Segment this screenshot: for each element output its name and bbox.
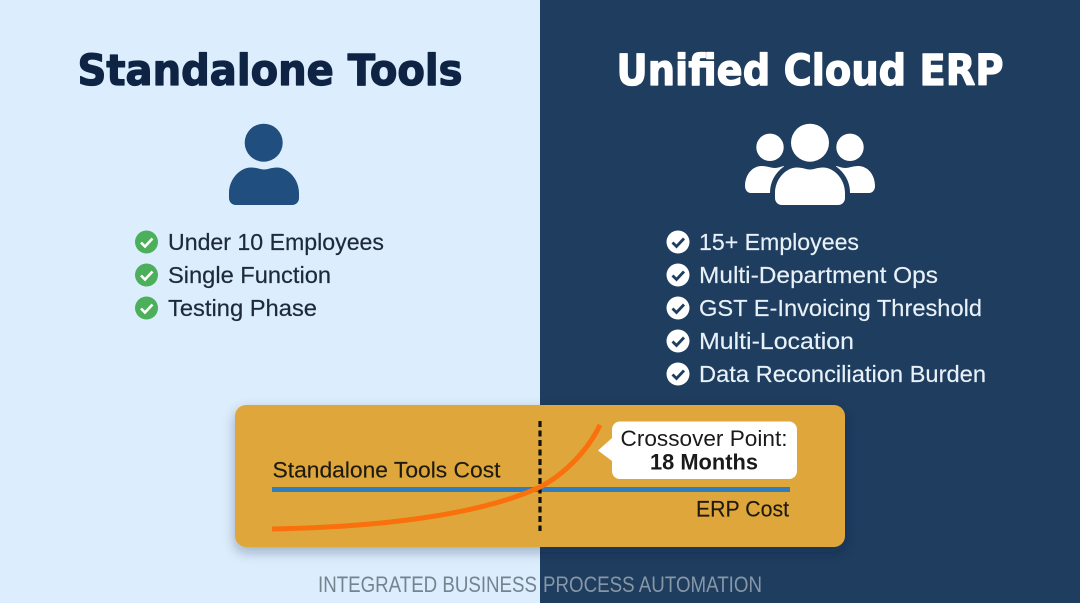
panel: unified cloud ERP background: [540, 0, 1080, 603]
line: ERP cost: [272, 487, 790, 492]
item: 15+ Employees: 15+ Employees: [699, 229, 859, 255]
footer: integrated business process automation: PROCESS AUTOMATION: [543, 572, 762, 597]
footer: integrated business process automation: INTEGRATED BUSINESS: [318, 572, 537, 597]
item: GST E-Invoicing Threshold: GST E-Invoicing Threshold: [699, 295, 982, 321]
icon: single person: [229, 124, 299, 205]
footer: integrated business process automation: [318, 572, 762, 597]
panel: cost crossover chart: [235, 405, 845, 547]
item: Multi-Department Ops: Multi-Department Ops: [699, 262, 938, 288]
heading: Standalone Tools: Standalone Tools: [78, 46, 462, 96]
icon: group of people: [745, 124, 875, 205]
item: Testing Phase: Testing Phase: [168, 295, 317, 321]
label: ERP Cost: ERP Cost: [696, 496, 790, 522]
label: Standalone Tools Cost: Standalone Tools Cost: [272, 458, 501, 482]
list: unified cloud ERP criteria: [666, 229, 986, 387]
line: crossover marker: [538, 421, 542, 531]
callout: crossover point: 18 Months: [650, 450, 758, 474]
item: Data Reconciliation Burden: Data Reconciliation Burden: [699, 361, 986, 387]
list: standalone tools criteria: [135, 229, 384, 321]
callout: crossover point: Crossover Point:: [620, 426, 788, 451]
item: Under 10 Employees: Under 10 Employees: [168, 229, 384, 255]
item: Single Function: Single Function: [168, 262, 331, 288]
line: standalone tools cost curve: [272, 425, 600, 529]
callout: crossover point: [598, 422, 797, 479]
heading: Unified Cloud ERP: Unified Cloud ERP: [616, 46, 1004, 96]
item: Multi-Location: Multi-Location: [699, 328, 854, 354]
panel: standalone tools background: [0, 0, 540, 603]
